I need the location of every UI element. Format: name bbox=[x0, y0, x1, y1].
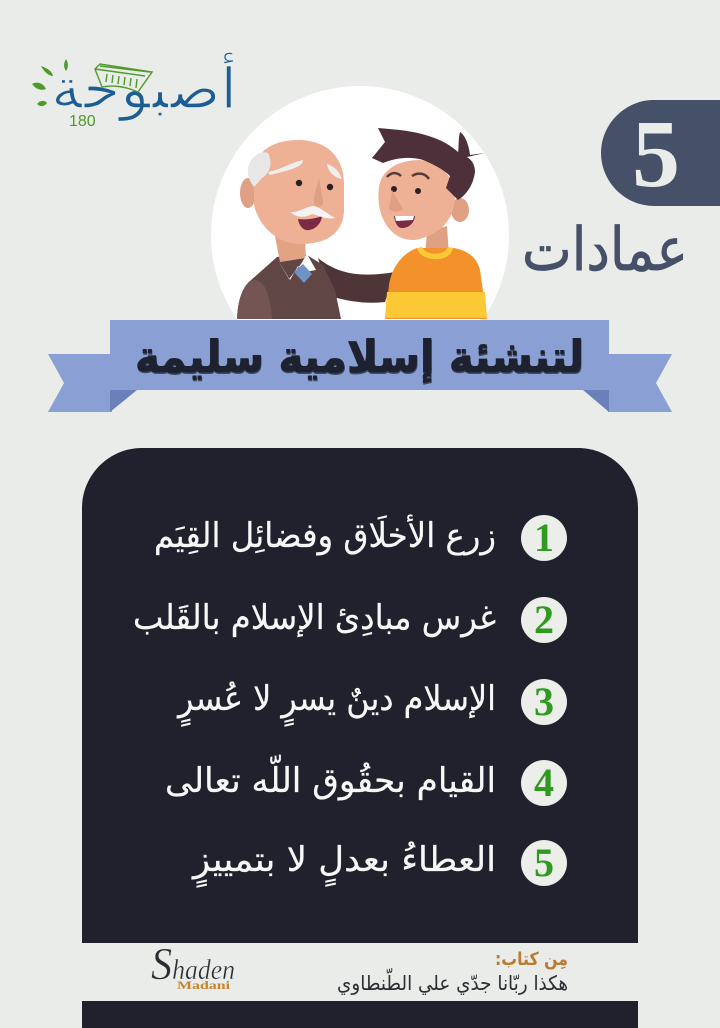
teeth bbox=[395, 216, 414, 221]
icon: building bbox=[95, 64, 152, 92]
right eyebrow bbox=[327, 164, 342, 179]
ribbon title shadow: لتنشئة إسلامية سليمة bbox=[136, 334, 584, 384]
sweater bbox=[237, 255, 341, 319]
heading: pillars: عمادات bbox=[522, 215, 688, 285]
moustache bbox=[290, 206, 335, 218]
number circle 4 bbox=[521, 760, 567, 806]
list item 5 bbox=[191, 840, 567, 888]
head bbox=[254, 140, 344, 244]
nose bbox=[314, 178, 323, 207]
right eyebrow bbox=[412, 174, 429, 179]
collar bbox=[276, 254, 316, 280]
ribbon body bbox=[110, 320, 609, 390]
neck bbox=[425, 226, 449, 256]
number 4: 4 bbox=[534, 760, 554, 805]
ribbon title: لتنشئة إسلامية سليمة bbox=[135, 332, 584, 383]
ribbon banner bbox=[48, 320, 672, 412]
right tail bbox=[608, 354, 672, 412]
left fold bbox=[110, 390, 137, 412]
credit label: مِن كتاب: bbox=[495, 949, 568, 970]
right fold bbox=[583, 390, 609, 412]
signature name: Shaden bbox=[151, 938, 235, 989]
item text 3: الإسلام دينٌ يسرٍ لا عُسرٍ bbox=[176, 679, 496, 727]
logo number: 180 bbox=[69, 113, 96, 130]
ear bbox=[451, 198, 469, 222]
number badge bbox=[601, 100, 720, 207]
right eye bbox=[327, 184, 333, 190]
number 1: 1 bbox=[534, 515, 554, 560]
hair bbox=[248, 152, 270, 187]
left eyebrow bbox=[268, 160, 303, 175]
number circle 3 bbox=[521, 679, 567, 725]
logo wordmark: أصبوحة bbox=[51, 52, 237, 122]
mouth bbox=[394, 216, 415, 228]
hair bbox=[372, 128, 485, 200]
book title: هكذا ربّانا جدّي علي الطّنطاوي bbox=[337, 968, 568, 996]
right eye bbox=[415, 188, 421, 194]
number 2: 2 bbox=[534, 597, 554, 642]
item text 4: القيام بحقُوق اللّه تعالى bbox=[165, 756, 496, 801]
nose bbox=[389, 190, 403, 212]
item text 5: العطاءُ بعدلٍ لا بتمييزٍ bbox=[191, 840, 496, 888]
left eyebrow bbox=[387, 173, 401, 177]
illustration: boy bbox=[372, 128, 487, 319]
item text 1: زرع الأخلَاق وفضائِل القِيَم bbox=[154, 514, 496, 556]
left tail bbox=[48, 354, 112, 412]
badge number: 5 bbox=[632, 100, 680, 207]
signature bbox=[151, 938, 235, 992]
list item 3 bbox=[176, 679, 567, 727]
sweater light side bbox=[237, 280, 272, 319]
shirt stripe bbox=[385, 292, 487, 318]
tie bbox=[294, 264, 312, 283]
panel: list bbox=[82, 448, 638, 943]
ear bbox=[240, 178, 256, 208]
logo bbox=[32, 52, 237, 130]
illustration circle bbox=[211, 86, 509, 384]
illustration: grandfather bbox=[237, 140, 395, 319]
item text 2: غرس مبادِئ الإسلام بالقَلب bbox=[133, 598, 496, 638]
signature surname: Madani bbox=[177, 978, 231, 992]
mouth bbox=[298, 216, 322, 230]
face bbox=[378, 160, 455, 240]
source credit bbox=[337, 949, 568, 996]
bottom strip bbox=[82, 1001, 638, 1028]
list item 2 bbox=[133, 597, 567, 643]
eyes bbox=[391, 186, 397, 192]
number circle 5 bbox=[521, 840, 567, 886]
number circle 1 bbox=[521, 515, 567, 561]
number circle 2 bbox=[521, 597, 567, 643]
number 3: 3 bbox=[534, 679, 554, 724]
icon: sun leaves bbox=[32, 59, 68, 106]
neck bbox=[275, 236, 306, 262]
shirt collar bbox=[417, 247, 453, 259]
arm bbox=[318, 258, 395, 303]
shirt bbox=[385, 248, 487, 319]
eyes bbox=[296, 180, 302, 186]
list item 4 bbox=[165, 756, 567, 806]
number 5: 5 bbox=[534, 840, 554, 885]
badge shape bbox=[601, 100, 720, 206]
list item 1 bbox=[154, 514, 567, 561]
